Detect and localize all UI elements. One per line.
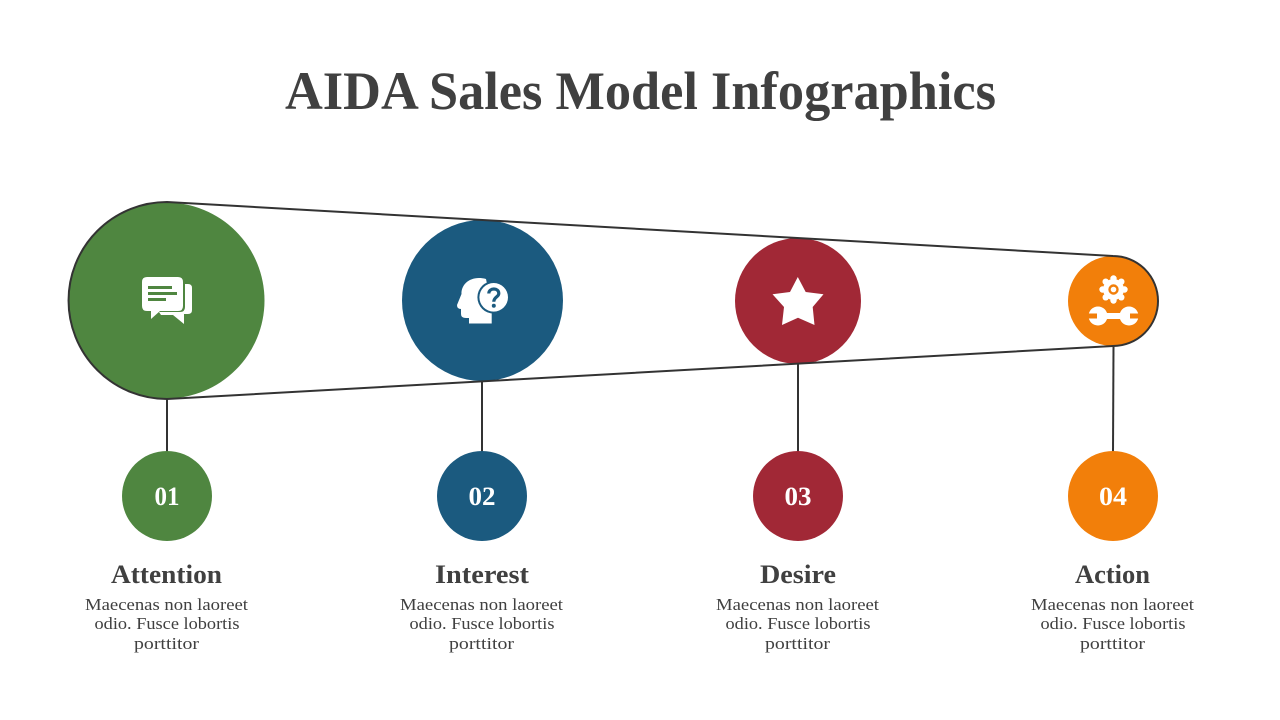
large circle: desire: [735, 238, 861, 364]
text block: action: Maecenas non laoreet: [1031, 595, 1194, 614]
large circle: action: [1068, 256, 1158, 346]
text block: interest: Interest: [435, 559, 529, 589]
number badge: 03: 03: [784, 482, 812, 511]
text block: interest: odio. Fusce lobortis: [410, 614, 554, 633]
text block: desire: [716, 559, 879, 653]
text block: attention: Maecenas non laoreet: [85, 595, 248, 614]
number badge: 03: [753, 451, 843, 541]
number badge: 02: [437, 451, 527, 541]
text block: action: odio. Fusce lobortis: [1040, 614, 1186, 633]
text block: desire: Desire: [760, 559, 836, 589]
icon: star: [772, 277, 824, 325]
text block: attention: [85, 559, 248, 653]
text block: attention: odio. Fusce lobortis: [94, 614, 240, 633]
number badge: 01: [122, 451, 212, 541]
number badge: 04: 04: [1099, 482, 1127, 511]
connector: desire: [797, 363, 799, 452]
text block: interest: [400, 559, 563, 653]
text block: interest: Maecenas non laoreet: [400, 595, 563, 614]
large circle: attention: [68, 202, 264, 398]
number badge: 02: 02: [468, 482, 496, 511]
connector: action: [1112, 346, 1114, 452]
text block: action: Action: [1075, 559, 1150, 589]
text block: interest: porttitor: [449, 634, 514, 653]
text block: attention: porttitor: [134, 634, 199, 653]
large circle: interest: [402, 220, 563, 381]
connector: attention: [166, 399, 168, 452]
text block: desire: porttitor: [765, 634, 830, 653]
text block: desire: Maecenas non laoreet: [716, 595, 879, 614]
number badge: 01: 01: [154, 482, 180, 511]
number badge: 04: [1068, 451, 1158, 541]
text block: attention: Attention: [111, 559, 222, 589]
icon: chat bubbles: [142, 277, 192, 324]
text block: desire: odio. Fusce lobortis: [726, 614, 870, 633]
connector: interest: [481, 380, 483, 452]
text block: action: [1031, 559, 1194, 653]
funnel outline: [69, 202, 1158, 399]
icon: head with question mark: [457, 278, 510, 324]
text block: action: porttitor: [1080, 634, 1145, 653]
icon: gear and wrench: [1086, 275, 1141, 326]
title: AIDA Sales Model Infographics: [285, 61, 996, 121]
